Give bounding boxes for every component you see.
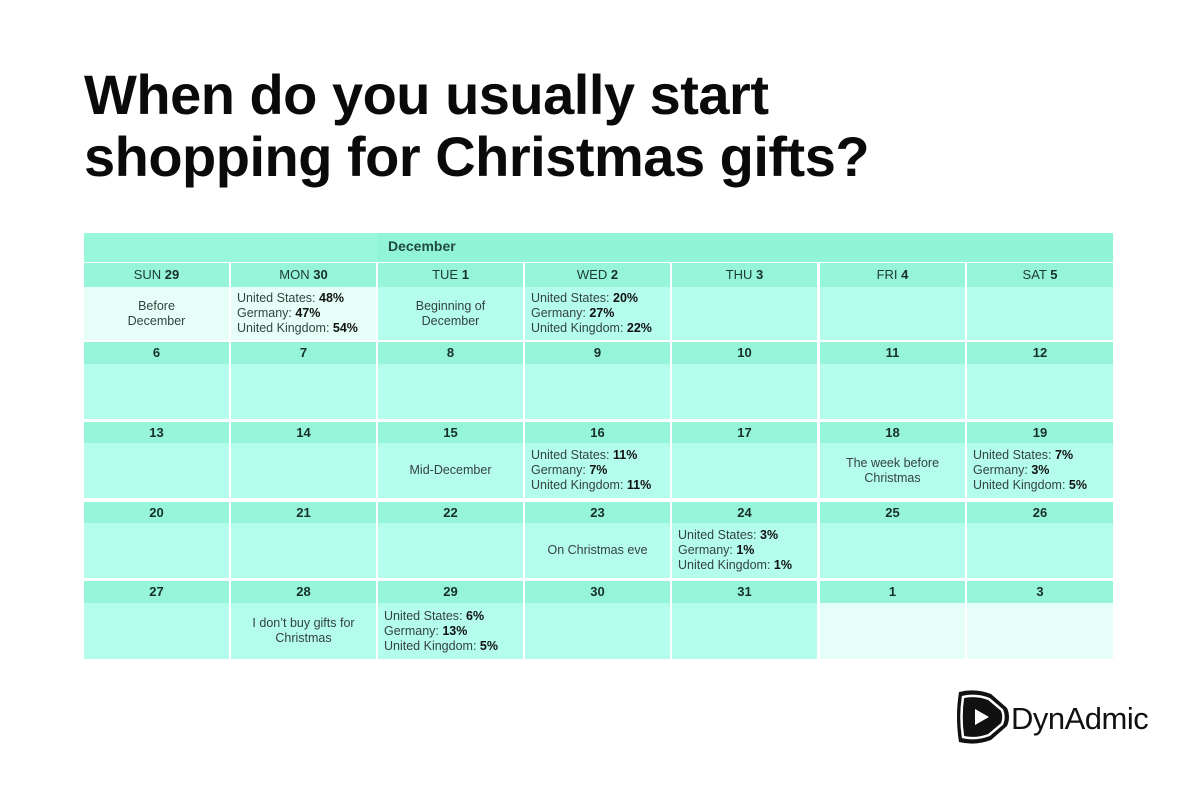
calendar: On Christmas eve bbox=[547, 543, 648, 557]
row 4 bbox=[84, 502, 229, 578]
calendar: 22 bbox=[443, 505, 458, 520]
calendar: 30 bbox=[590, 584, 605, 599]
calendar: 17 bbox=[737, 425, 752, 440]
calendar: MON 30 bbox=[279, 267, 328, 282]
title bbox=[84, 63, 869, 188]
row 2 bbox=[84, 342, 229, 419]
row 1: SUN 29 bbox=[134, 267, 179, 282]
calendar: 18 bbox=[885, 425, 900, 440]
calendar: 7 bbox=[300, 345, 307, 360]
calendar: Christmas bbox=[275, 631, 332, 645]
calendar: 29 bbox=[443, 584, 458, 599]
calendar: United Kingdom: 54% bbox=[237, 321, 358, 335]
calendar: 23 bbox=[590, 505, 605, 520]
calendar: 9 bbox=[594, 345, 601, 360]
calendar: United States: 6% bbox=[384, 608, 484, 622]
calendar: 15 bbox=[443, 425, 458, 440]
calendar: 10 bbox=[737, 345, 752, 360]
calendar: 26 bbox=[1033, 505, 1047, 520]
wordmark: DynAdmic bbox=[1011, 701, 1148, 736]
row 1: December bbox=[128, 314, 185, 328]
month header band bbox=[84, 233, 1113, 262]
calendar: United Kingdom: 5% bbox=[384, 638, 498, 652]
calendar: Germany: 3% bbox=[973, 463, 1049, 477]
calendar: 12 bbox=[1033, 345, 1047, 360]
calendar: Germany: 47% bbox=[237, 306, 320, 320]
icon: play screen bbox=[957, 690, 1009, 744]
calendar: Germany: 27% bbox=[531, 306, 614, 320]
calendar: THU 3 bbox=[726, 267, 763, 282]
calendar: United States: 11% bbox=[531, 448, 637, 462]
calendar: The week before bbox=[846, 456, 939, 470]
title: shopping for Christmas gifts? bbox=[84, 125, 869, 188]
calendar: 11 bbox=[886, 345, 899, 360]
month header band: December bbox=[388, 238, 456, 254]
calendar: Germany: 13% bbox=[384, 624, 467, 638]
calendar: United States: 3% bbox=[678, 528, 778, 542]
calendar: 16 bbox=[590, 425, 605, 440]
row 4: 20 bbox=[149, 505, 164, 520]
calendar: FRI 4 bbox=[877, 267, 908, 282]
row 1: Before bbox=[138, 298, 175, 312]
calendar: 24 bbox=[737, 505, 752, 520]
calendar: United States: 20% bbox=[531, 291, 638, 305]
row 3: 13 bbox=[149, 425, 164, 440]
calendar: Germany: 7% bbox=[531, 463, 607, 477]
calendar: WED 2 bbox=[577, 267, 618, 282]
calendar: 14 bbox=[296, 425, 311, 440]
title: When do you usually start bbox=[84, 63, 768, 126]
logo: DynAdmic bbox=[957, 690, 1148, 744]
calendar: 1 bbox=[889, 584, 896, 599]
calendar: 8 bbox=[447, 345, 454, 360]
calendar: 31 bbox=[737, 584, 752, 599]
calendar: Germany: 1% bbox=[678, 543, 754, 557]
calendar: I don’t buy gifts for bbox=[252, 616, 355, 630]
calendar: SAT 5 bbox=[1023, 267, 1057, 282]
calendar: 3 bbox=[1036, 584, 1044, 599]
calendar: United Kingdom: 5% bbox=[973, 478, 1087, 492]
calendar: 19 bbox=[1033, 425, 1047, 440]
row 5: 27 bbox=[149, 584, 164, 599]
calendar: Beginning of bbox=[416, 298, 485, 312]
calendar: Christmas bbox=[864, 470, 921, 484]
calendar: 25 bbox=[885, 505, 900, 520]
calendar: United Kingdom: 1% bbox=[678, 558, 792, 572]
calendar: Mid-December bbox=[410, 463, 491, 477]
calendar: United States: 48% bbox=[237, 291, 344, 305]
calendar: United States: 7% bbox=[973, 448, 1073, 462]
calendar: United Kingdom: 22% bbox=[531, 321, 652, 335]
calendar: United Kingdom: 11% bbox=[531, 478, 651, 492]
calendar: TUE 1 bbox=[432, 267, 469, 282]
row 5 bbox=[84, 581, 229, 659]
row 2: 6 bbox=[153, 345, 160, 360]
row 1 bbox=[84, 263, 229, 340]
calendar: 21 bbox=[296, 505, 311, 520]
calendar: 28 bbox=[296, 584, 311, 599]
row 3 bbox=[84, 422, 229, 498]
calendar: December bbox=[422, 314, 479, 328]
